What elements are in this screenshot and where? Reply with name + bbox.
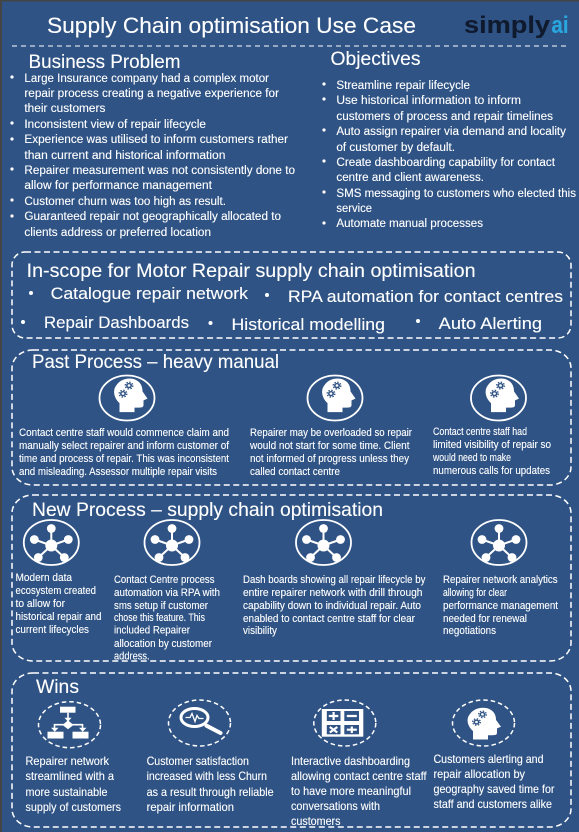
text: new 1: historical repair and (16, 611, 102, 623)
text: new 4: negotiations (443, 625, 497, 637)
text: past 1: and misleading. Assessor multiple repair visits (19, 466, 218, 478)
text: win 3: conversations with (291, 799, 380, 813)
icon: calculator (314, 700, 376, 746)
text: new 1: ecosystem created (16, 585, 96, 597)
bullet list: business problem: Guaranteed repair not geographically allocated to (24, 211, 281, 223)
bullet list: business problem (10, 73, 295, 239)
text: win 4: geography saved time for (434, 782, 555, 796)
text: new 1: Modern data (16, 572, 72, 584)
text: win 2: repair information (147, 800, 234, 814)
icon: head with gears 2 (308, 376, 362, 420)
text: new 3 (243, 574, 426, 637)
heading: new process: New Process – supply chain optimisation (32, 499, 383, 521)
text: past 3: Contact centre staff had (433, 426, 527, 438)
text: past 2: would not start for some time. Client (249, 440, 410, 452)
bullet list: business problem: their customers (24, 103, 106, 115)
bullet list: business problem: Customer churn was too high as result. (24, 196, 226, 208)
bullet list: objectives: service (336, 203, 372, 215)
text: new 3: entire repairer network with drill through (243, 587, 422, 599)
panel: new process (12, 495, 571, 662)
in-scope items (21, 285, 563, 334)
text: new 2: Contact Centre process (114, 574, 215, 586)
text: win 3: to have more meaningful (291, 784, 411, 798)
title: Supply Chain optimisation Use Case (47, 13, 416, 38)
text: new 3: visibility (243, 625, 278, 637)
bullet list: objectives: of customer by default. (336, 142, 455, 154)
text: new 1 (16, 572, 102, 636)
icon: network 3 (296, 520, 351, 565)
text: new 3: Dash boards showing all repair lifecycle by (243, 574, 426, 586)
bullet list: business problem: than current and historical information (24, 150, 225, 162)
bullet list: objectives: customers of process and repair timelines (336, 111, 553, 123)
text: win 2: Customer satisfaction (147, 754, 249, 768)
bullet list: business problem: Repairer measurement was not consistently done to (24, 165, 295, 177)
text: new 3: capability down to individual repair. Auto (243, 600, 421, 612)
text: past 2: not informed of progress unless they (250, 453, 410, 465)
bullet list: objectives (322, 80, 576, 230)
text: win 4 (434, 752, 555, 811)
text: past 2: called contact centre (250, 466, 340, 478)
bullet list: business problem: repair process creating a negative experience for (24, 88, 279, 100)
text: past 1: manually select repairer and inform customer of (19, 440, 230, 452)
heading: business problem: Business Problem (28, 51, 180, 73)
text: win 1: supply of customers (26, 800, 121, 814)
in-scope items: Historical modelling (232, 316, 385, 334)
icon: network 4 (472, 520, 526, 565)
text: win 1: streamlined with a (26, 769, 114, 783)
text: new 2: sms setup if customer (114, 600, 208, 612)
logo: simplyai: simply (464, 12, 551, 39)
logo: simplyai: ai (552, 12, 568, 39)
panel: objectives (322, 48, 576, 230)
panel: in-scope (12, 252, 571, 338)
bullet list: business problem: clients address or preferred location (24, 227, 211, 239)
heading: objectives: Objectives (330, 48, 421, 70)
text: win 2: as a result through reliable (147, 785, 274, 799)
in-scope items: Catalogue repair network (51, 285, 249, 303)
text: win 3: customers (291, 814, 341, 828)
text: past 1: Contact centre staff would commence claim and (19, 427, 229, 439)
heading: in-scope: In-scope for Motor Repair supply chain optimisation (27, 260, 476, 282)
in-scope items: Repair Dashboards (44, 314, 189, 332)
text: new 2: chose this feature. This (114, 612, 205, 624)
bullet list: business problem: allow for performance management (24, 180, 213, 192)
heading: wins: Wins (36, 676, 79, 698)
text: new 4: Repairer network analytics (443, 574, 558, 586)
icon: head with gears 1 (100, 376, 154, 420)
text: win 3: Interactive dashboarding (291, 754, 410, 768)
text: new 2: automation via RPA with (114, 587, 220, 599)
text: win 4: staff and customers alike (434, 797, 552, 811)
text: win 2 (147, 754, 274, 814)
text: win 1: Repairer network (26, 754, 109, 768)
bullet list: business problem: Experience was utilised to inform customers rather (24, 134, 288, 146)
text: new 1: current lifecycles (16, 624, 90, 636)
text: past 2 (249, 427, 412, 478)
icon: hierarchy (38, 702, 100, 748)
text: new 4: needed for renewal (443, 613, 527, 625)
icon: network 2 (144, 520, 200, 565)
text: win 4: Customers alerting and (434, 752, 544, 766)
icon: head with gears 4 (452, 700, 514, 746)
text: win 3: allowing contact centre staff (291, 769, 427, 783)
bullet list: objectives: Use historical information to inform (336, 95, 521, 107)
text: past 3 (432, 426, 551, 477)
icon: magnifier (168, 700, 230, 746)
in-scope items: RPA automation for contact centres (288, 288, 563, 306)
text: past 1: time and process of repair. This was inconsistent (19, 453, 229, 465)
heading: past process: Past Process – heavy manual (32, 351, 279, 373)
text: win 4: repair allocation by (434, 767, 525, 781)
bullet list: objectives: SMS messaging to customers who elected this (336, 188, 576, 200)
text: past 1 (19, 427, 230, 478)
text: win 3 (291, 754, 427, 828)
text: past 3: numerous calls for updates (433, 465, 551, 477)
text: past 3: limited visibility of repair so (433, 439, 551, 451)
text: new 3: enabled to contact centre staff for clear (243, 613, 415, 625)
text: new 4: allowing for clear (443, 587, 507, 599)
bullet list: objectives: Auto assign repairer via demand and locality (336, 126, 566, 138)
text: new 4 (443, 574, 558, 637)
text: new 2: address. (114, 650, 150, 662)
text: win 1: more sustainable (26, 785, 108, 799)
bullet list: business problem: Large Insurance company had a complex motor (24, 73, 269, 85)
panel: business problem (10, 51, 295, 239)
text: win 2: increased with less Churn (147, 769, 267, 783)
text: new 2: allocation by customer (114, 638, 212, 650)
text: past 3: would need to make (432, 452, 511, 464)
text: win 1 (26, 754, 121, 814)
bullet list: objectives: Streamline repair lifecycle (336, 80, 470, 92)
bullet list: objectives: Automate manual processes (336, 218, 483, 230)
bullet list: objectives: Create dashboarding capability for contact (336, 157, 556, 169)
bullet list: objectives: centre and client awareness. (336, 172, 484, 184)
text: new 4: performance management (443, 600, 558, 612)
icon: head with gears 3 (471, 376, 526, 420)
in-scope items: Auto Alerting (439, 315, 542, 333)
panel: wins (12, 673, 571, 828)
text: past 2: Repairer may be overloaded so repair (250, 427, 412, 439)
text: new 1: to allow for (16, 598, 65, 610)
panel: past process (12, 350, 571, 485)
text: new 2 (114, 574, 220, 662)
text: new 2: included Repairer (114, 624, 190, 636)
icon: network 1 (24, 520, 79, 565)
bullet list: business problem: Inconsistent view of repair lifecycle (24, 119, 206, 131)
